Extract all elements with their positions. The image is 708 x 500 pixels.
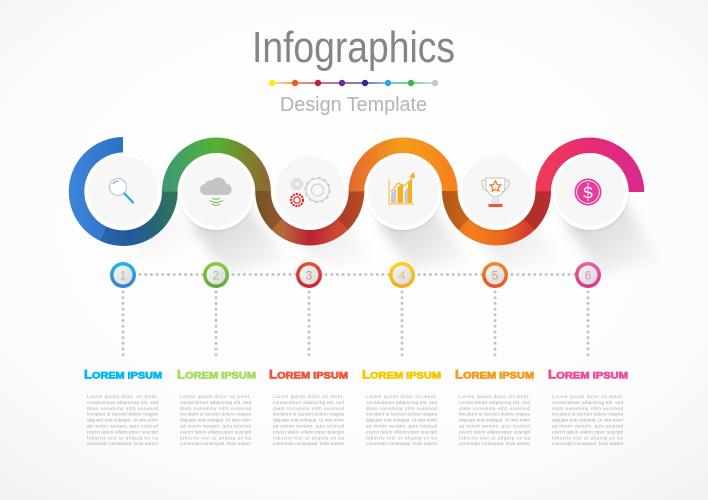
icon: coin: S: [583, 185, 593, 202]
text block 2: ad minim veniam, quis nostrud: [180, 424, 251, 428]
text block 6: diam nonummy nibh euismod: [552, 406, 623, 411]
heading 4: LOREM IPSUM: [362, 370, 441, 382]
text block 2: lobortis nisl ut aliquip ex ea: [180, 435, 251, 440]
dotted connectors: [123, 274, 588, 356]
text block 6: [552, 394, 624, 446]
text block 2: Lorem ipsum dolor sit amet,: [180, 394, 251, 399]
number badge 3: 3: [306, 268, 313, 282]
text block 1: exerci tation ullamcorper suscipit: [87, 429, 159, 434]
text block 2: consectetuer adipiscing elit, sed: [180, 400, 251, 405]
text block 3: diam nonummy nibh euismod: [273, 406, 344, 411]
text block 4: diam nonummy nibh euismod: [366, 406, 437, 411]
heading 5: LOREM IPSUM: [455, 370, 534, 382]
text block 1: ad minim veniam, quis nostrud: [87, 424, 158, 428]
icon: magnifying glass: [110, 178, 133, 202]
text block 6: lobortis nisl ut aliquip ex ea: [552, 435, 623, 440]
text block 1: Lorem ipsum dolor sit amet,: [87, 394, 158, 399]
text block 4: Lorem ipsum dolor sit amet,: [366, 394, 437, 399]
coloured dot line: [269, 80, 438, 86]
text block 4: commodo consequat. Duis autem: [366, 441, 437, 446]
number badge 5: 5: [492, 268, 499, 282]
number badge 1: 1: [120, 268, 127, 282]
text block 5: Lorem ipsum dolor sit amet,: [459, 394, 530, 399]
text block 2: diam nonummy nibh euismod: [180, 406, 251, 411]
text block 6: consectetuer adipiscing elit, sed: [552, 400, 623, 405]
icon: bar chart with arrow: [389, 172, 415, 204]
number badge 5: [482, 262, 508, 288]
circle 4: chart: [365, 154, 441, 230]
subtitle: Design Template: [280, 94, 427, 116]
text block 3: consectetuer adipiscing elit, sed: [273, 400, 344, 405]
icon: gears: [291, 178, 330, 206]
text block 5: [459, 394, 531, 446]
long shadows: [100, 182, 660, 272]
number badge 2: [203, 262, 229, 288]
heading 2: LOREM IPSUM: [177, 370, 256, 382]
text block 2: commodo consequat. Duis autem: [180, 441, 251, 446]
text block 1: diam nonummy nibh euismod: [87, 406, 158, 411]
number badge 4: [389, 262, 415, 288]
text block 3: aliquam erat volutpat. Ut wisi enim: [273, 418, 344, 423]
text block 3: Lorem ipsum dolor sit amet,: [273, 394, 344, 399]
text block 6: ad minim veniam, quis nostrud: [552, 424, 623, 428]
text block 2: aliquam erat volutpat. Ut wisi enim: [180, 418, 251, 423]
text block 2: tincidunt ut laoreet dolore magna: [180, 412, 251, 417]
text block 3: tincidunt ut laoreet dolore magna: [273, 412, 344, 417]
text block 4: tincidunt ut laoreet dolore magna: [366, 412, 437, 417]
text block 1: commodo consequat. Duis autem: [87, 441, 158, 446]
text block 5: exerci tation ullamcorper suscipit: [459, 429, 531, 434]
circle 6: dollar coin: [552, 154, 628, 230]
text block 3: ad minim veniam, quis nostrud: [273, 424, 344, 428]
circle 3: gears: [272, 154, 348, 230]
text block 4: [366, 394, 438, 446]
text block 1: aliquam erat volutpat. Ut wisi enim: [87, 418, 158, 423]
text block 6: exerci tation ullamcorper suscipit: [552, 429, 624, 434]
text block 2: exerci tation ullamcorper suscipit: [180, 429, 252, 434]
text block 3: commodo consequat. Duis autem: [273, 441, 344, 446]
text block 4: lobortis nisl ut aliquip ex ea: [366, 435, 437, 440]
text block 6: commodo consequat. Duis autem: [552, 441, 623, 446]
text block 6: aliquam erat volutpat. Ut wisi enim: [552, 418, 623, 423]
text block 2: [180, 394, 252, 446]
text block 5: tincidunt ut laoreet dolore magna: [459, 412, 530, 417]
number badge 2: 2: [213, 268, 220, 282]
text block 1: tincidunt ut laoreet dolore magna: [87, 412, 158, 417]
text block 5: lobortis nisl ut aliquip ex ea: [459, 435, 530, 440]
number badge 6: [575, 262, 601, 288]
text block 4: exerci tation ullamcorper suscipit: [366, 429, 438, 434]
circle 2: cloud: [178, 154, 254, 230]
title: Infographics: [252, 23, 455, 72]
icon: trophy: [482, 178, 509, 207]
text block 1: lobortis nisl ut aliquip ex ea: [87, 435, 158, 440]
number badge 1: [110, 262, 136, 288]
heading 3: LOREM IPSUM: [269, 370, 348, 382]
text block 5: commodo consequat. Duis autem: [459, 441, 530, 446]
icon: cloud with signal: [200, 177, 232, 205]
text block 5: consectetuer adipiscing elit, sed: [459, 400, 530, 405]
heading 6: LOREM IPSUM: [548, 370, 628, 382]
circle 5: trophy: [459, 154, 535, 230]
text block 5: diam nonummy nibh euismod: [459, 406, 530, 411]
text block 3: [273, 394, 345, 446]
ribbon: [76, 145, 636, 238]
text block 4: ad minim veniam, quis nostrud: [366, 424, 437, 428]
text block 4: aliquam erat volutpat. Ut wisi enim: [366, 418, 437, 423]
number badge 3: [296, 262, 322, 288]
text block 1: consectetuer adipiscing elit, sed: [87, 400, 158, 405]
text block 4: consectetuer adipiscing elit, sed: [366, 400, 437, 405]
ribbon fold shading: [103, 191, 543, 238]
heading 1: LOREM IPSUM: [84, 370, 162, 382]
number badge 6: 6: [585, 268, 592, 282]
text block 3: exerci tation ullamcorper suscipit: [273, 429, 345, 434]
text block 3: lobortis nisl ut aliquip ex ea: [273, 435, 344, 440]
circle 1: search: [85, 154, 161, 230]
text block 5: aliquam erat volutpat. Ut wisi enim: [459, 418, 530, 423]
text block 6: Lorem ipsum dolor sit amet,: [552, 394, 623, 399]
text block 6: tincidunt ut laoreet dolore magna: [552, 412, 623, 417]
number badge 4: 4: [399, 268, 406, 282]
text block 1: [87, 394, 159, 446]
text block 5: ad minim veniam, quis nostrud: [459, 424, 530, 428]
